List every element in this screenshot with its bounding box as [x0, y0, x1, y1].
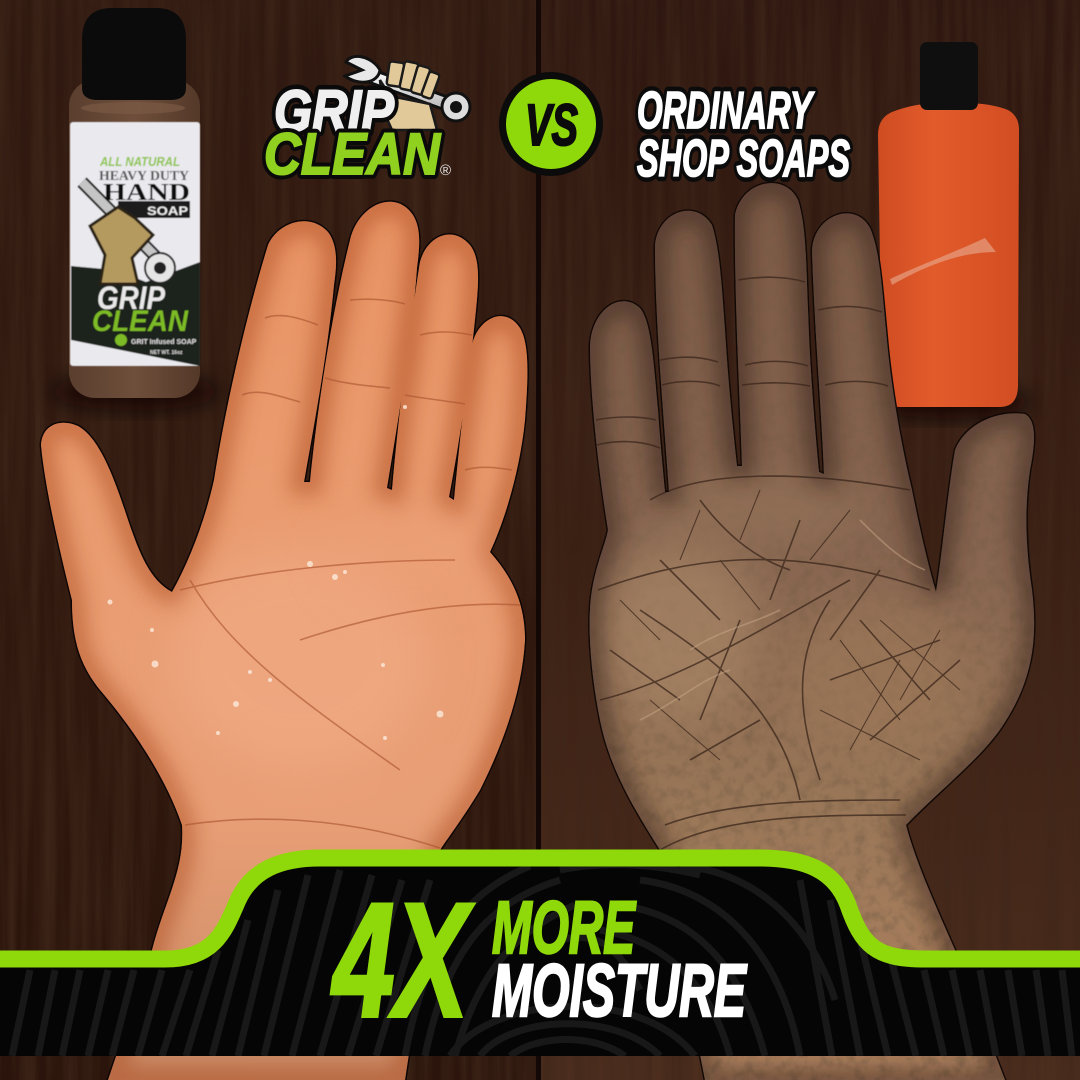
- logo word: GRIP: GRIP: [274, 79, 394, 144]
- fingerprint pattern: [12, 865, 1072, 1056]
- bottom banner: [0, 858, 1080, 1056]
- bottle label: CLEAN: [92, 305, 189, 338]
- VS badge: [499, 72, 603, 176]
- green border: [0, 858, 1080, 959]
- icon: fist: [380, 61, 440, 130]
- headline: [331, 870, 748, 1051]
- heading: ordinary shop soaps: SHOP SOAPS: [637, 130, 850, 188]
- heading: ordinary shop soaps: SHOP SOAPS: [637, 130, 850, 188]
- right hand: dirty: [585, 180, 1045, 1080]
- bottle label: ALL NATURAL: [99, 154, 180, 169]
- left soap bottle: Grip Clean: [50, 8, 220, 410]
- icon: wrench: [345, 56, 470, 121]
- headline: MOISTURE: [492, 949, 748, 1032]
- headline: MORE: [492, 886, 637, 969]
- headline: 4X: [331, 870, 474, 1051]
- heading: ordinary shop soaps: ORDINARY: [637, 82, 815, 140]
- logo word: GRIP: GRIP: [274, 79, 394, 144]
- logo word: CLEAN: CLEAN: [264, 122, 441, 187]
- right soap bottle: orange shop soap: [868, 42, 1032, 418]
- bottle label: GRIP: [97, 280, 166, 316]
- bottle label: HEAVY DUTY: [99, 169, 189, 184]
- bottle label: HAND: [103, 180, 190, 206]
- bottle label: GRIT Infused SOAP: [131, 339, 197, 346]
- bottle label: NET WT. 16oz: [150, 350, 183, 356]
- logo word: CLEAN: CLEAN: [264, 122, 441, 187]
- heading: ordinary shop soaps: [637, 82, 850, 188]
- heading: ordinary shop soaps: ORDINARY: [637, 82, 815, 140]
- bottle label: SOAP: [147, 204, 188, 218]
- registered mark: ®: [440, 162, 451, 179]
- Grip Clean logo: [264, 56, 470, 187]
- VS badge: VS: [525, 93, 578, 158]
- water droplets: [108, 405, 444, 740]
- bottle label: [70, 122, 200, 366]
- left hand: clean: [30, 190, 540, 1080]
